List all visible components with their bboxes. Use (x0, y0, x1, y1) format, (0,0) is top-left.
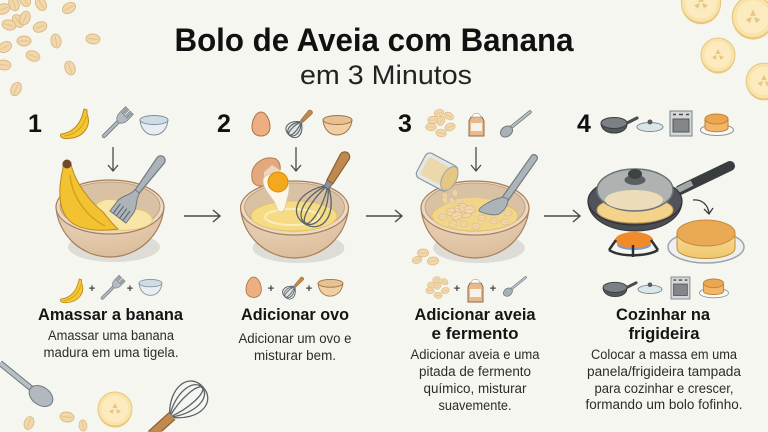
ingredient icons step 3 (426, 108, 530, 139)
title (174, 22, 574, 90)
heading step 4 (616, 305, 711, 343)
text step 4: panela/frigideira tampada (587, 364, 741, 379)
arrow down (108, 147, 118, 171)
illustration: bowl with egg and whisk (240, 144, 361, 263)
ingredient icons step 2 (252, 105, 352, 140)
title: Bolo de Aveia com Banana (174, 22, 574, 58)
icon row step 1: + (127, 283, 133, 295)
decoration: banana slices top right (681, 0, 768, 100)
panel: step 2 (217, 105, 361, 363)
arrow 2 to 3 (366, 210, 402, 222)
text step 1 (44, 328, 178, 360)
decoration: whisk bottom (148, 375, 214, 432)
panel: step 3 (398, 108, 540, 413)
text step 1: madura em uma tigela. (44, 345, 178, 360)
panel: step 4 (577, 110, 744, 412)
heading step 4: Cozinhar na (616, 305, 711, 324)
decoration: oats bottom left (22, 411, 87, 431)
text step 3 (410, 347, 540, 413)
step number 4: 4 (577, 110, 591, 138)
text step 4: Colocar a massa em uma (591, 347, 737, 362)
text step 4: para cozinhar e crescer, (594, 381, 734, 396)
icon row step 2: + (268, 283, 274, 295)
icon row step 4 (603, 277, 728, 299)
icon row step 2 (246, 273, 343, 301)
step number 2: 2 (217, 110, 231, 138)
step number 3: 3 (398, 110, 412, 138)
illustration: bowl with banana and fork (56, 151, 171, 262)
icon row step 1: + (89, 283, 95, 295)
text step 2 (238, 331, 352, 363)
text step 4: formando um bolo fofinho. (586, 397, 742, 412)
heading step 3: e fermento (432, 324, 518, 343)
icon row step 2: + (306, 283, 312, 295)
arrow down (291, 147, 301, 171)
text step 3: pitada de fermento (419, 364, 531, 379)
text step 3: químico, misturar (424, 381, 527, 396)
heading step 1: Amassar a banana (38, 305, 184, 324)
icon row step 3: + (490, 283, 496, 295)
heading step 3: Adicionar aveia (414, 305, 536, 324)
text step 4 (586, 347, 742, 412)
heading step 2: Adicionar ovo (241, 305, 349, 324)
step number 1: 1 (28, 110, 42, 138)
decoration: banana slice bottom (98, 392, 132, 428)
heading step 3 (414, 305, 536, 343)
icon row step 1 (60, 275, 162, 303)
illustration: bowl with oats and spoon (412, 151, 534, 265)
decoration: oats top left (0, 0, 100, 97)
ingredient icons step 1 (60, 107, 168, 141)
heading step 4: frigideira (628, 324, 700, 343)
text step 2: misturar bem. (254, 348, 336, 363)
arrow 1 to 2 (184, 210, 220, 222)
arrow down (471, 147, 481, 171)
panel: step 1 (28, 107, 184, 360)
text step 3: suavemente. (438, 398, 512, 413)
text step 1: Amassar uma banana (48, 328, 174, 343)
icon row step 3 (426, 276, 526, 302)
text step 2: Adicionar um ovo e (238, 331, 352, 346)
title: em 3 Minutos (300, 60, 472, 90)
ingredient icons step 4 (601, 111, 734, 136)
illustration: covered pan on burner (588, 166, 730, 257)
decoration: spoon bottom left (0, 363, 57, 411)
arrow 3 to 4 (544, 210, 580, 222)
arrow: to finished cake (693, 200, 713, 214)
text step 3: Adicionar aveia e uma (410, 347, 540, 362)
icon row step 3: + (454, 283, 460, 295)
illustration: finished cake on plate (668, 220, 744, 263)
